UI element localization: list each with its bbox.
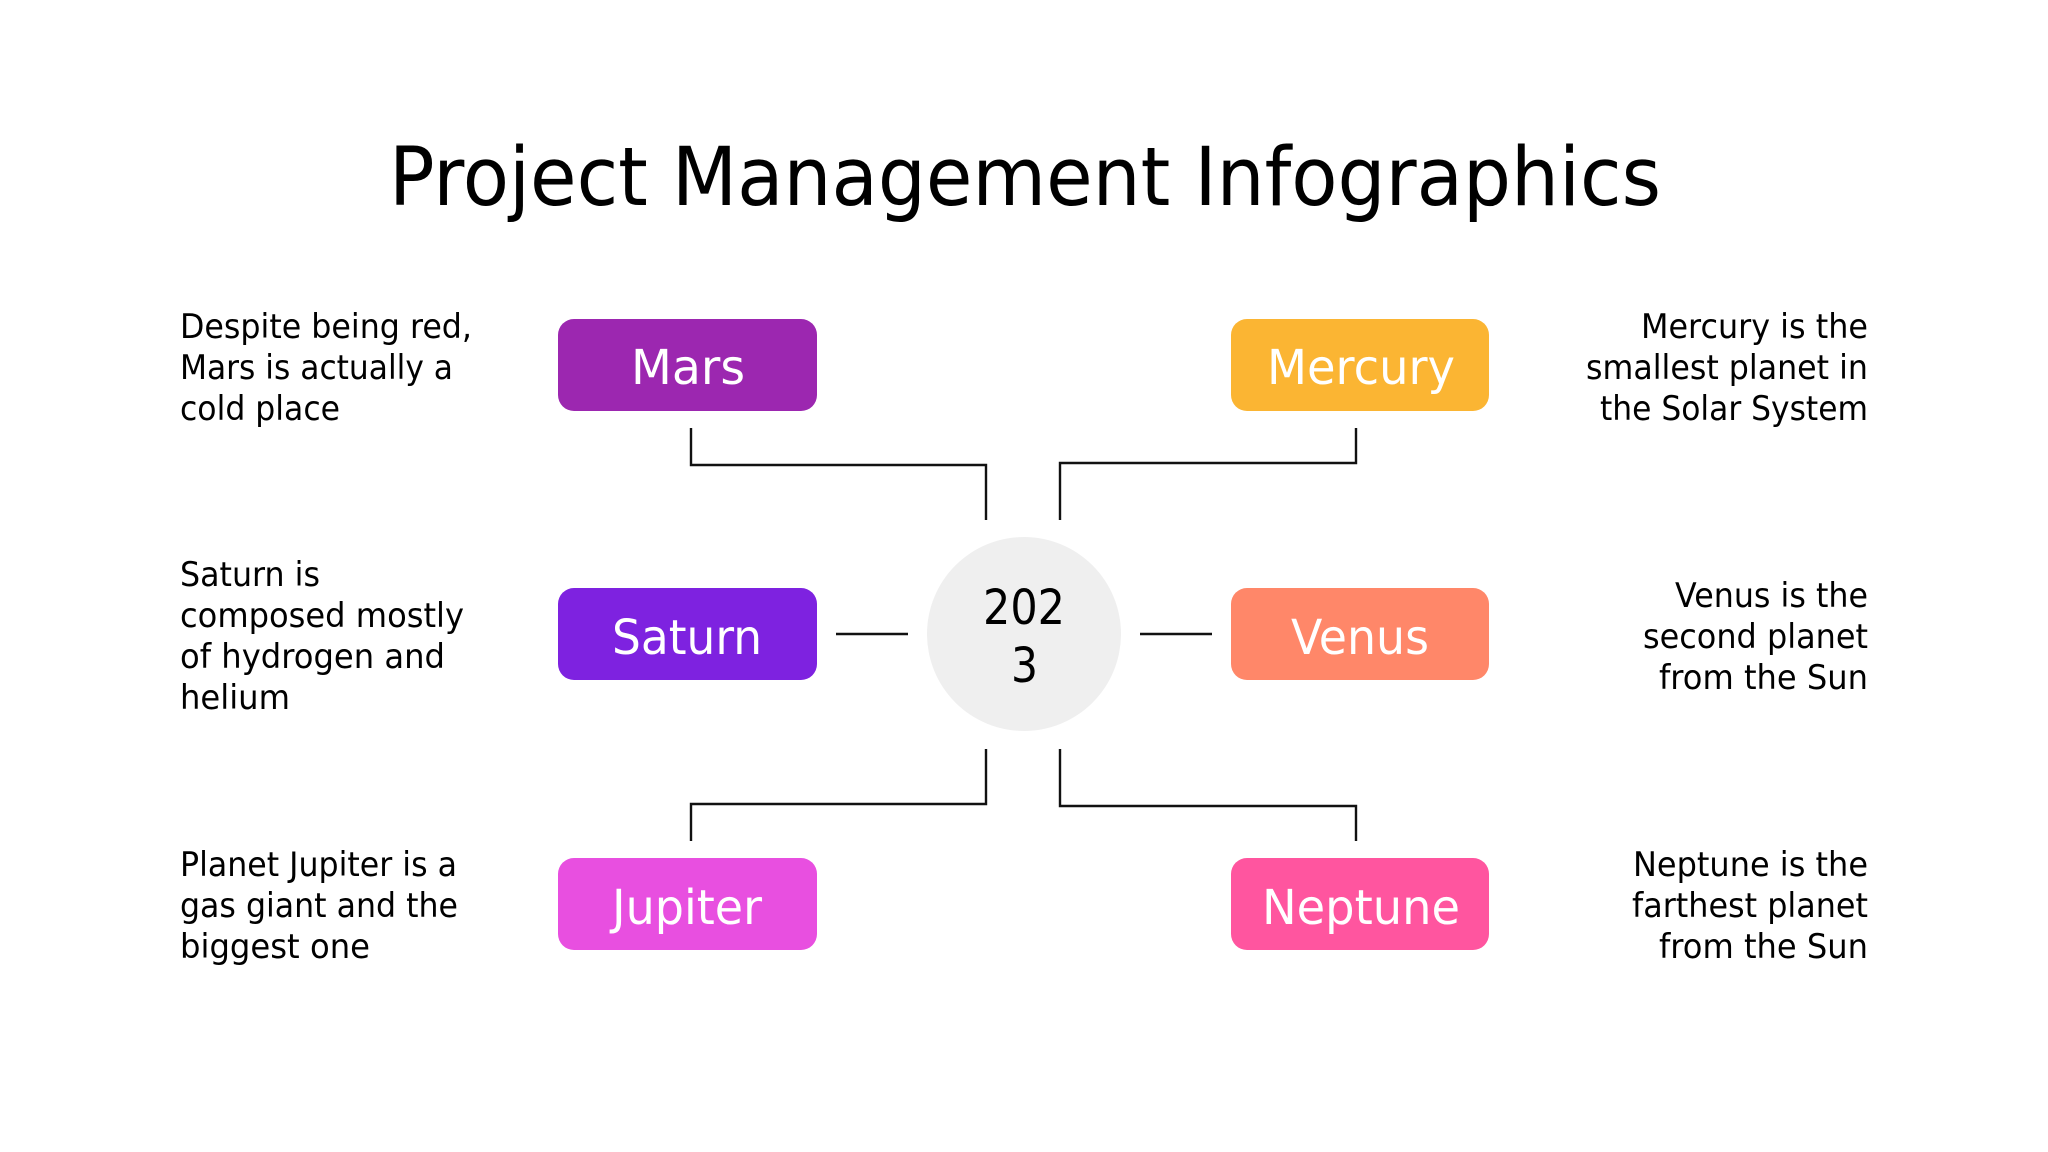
label box: Mercury: Mercury	[1267, 340, 1455, 396]
label box: Saturn: Saturn	[612, 610, 762, 666]
text block: Neptune description: Neptune is the	[1633, 845, 1868, 884]
text block: Venus description: Venus is the	[1675, 576, 1868, 615]
centre circle: year: 202	[983, 580, 1065, 636]
text block: Mercury description	[1586, 307, 1868, 428]
label box: Venus: Venus	[1291, 610, 1429, 666]
label box: Saturn	[558, 588, 817, 680]
text block: Neptune description: farthest planet	[1632, 886, 1868, 925]
connector: Mercury to centre	[1060, 428, 1356, 520]
title: Project Management Infographics	[389, 131, 1661, 225]
text block: Neptune description	[1632, 845, 1868, 966]
label box: Neptune	[1231, 858, 1489, 950]
centre circle: year	[927, 537, 1121, 731]
text block: Venus description: second planet	[1643, 617, 1868, 656]
text block: Venus description	[1643, 576, 1868, 697]
connector: Venus to centre	[1140, 633, 1212, 635]
text block: Saturn description: helium	[180, 678, 290, 717]
text block: Mars description: Despite being red,	[180, 307, 472, 346]
text block: Mars description: cold place	[180, 389, 340, 428]
text block: Mercury description: Mercury is the	[1641, 307, 1868, 346]
text block: Saturn description: composed mostly	[180, 596, 464, 635]
label box: Neptune: Neptune	[1262, 880, 1460, 936]
label box: Venus	[1231, 588, 1489, 680]
centre circle: year: 3	[1011, 638, 1038, 694]
text block: Mars description: Mars is actually a	[180, 348, 453, 387]
text block: Jupiter description: biggest one	[180, 927, 370, 966]
text block: Jupiter description: Planet Jupiter is a	[180, 845, 457, 884]
text block: Mars description	[180, 307, 472, 428]
label box: Jupiter: Jupiter	[609, 880, 762, 936]
connector: Mars to centre	[691, 428, 986, 520]
text block: Saturn description: Saturn is	[180, 555, 320, 594]
text block: Jupiter description	[180, 845, 458, 966]
label box: Mars	[558, 319, 817, 411]
label box: Mercury	[1231, 319, 1489, 411]
text block: Jupiter description: gas giant and the	[180, 886, 458, 925]
text block: Mercury description: the Solar System	[1600, 389, 1868, 428]
text block: Saturn description	[180, 555, 464, 717]
connector: Saturn to centre	[836, 633, 908, 635]
label box: Mars: Mars	[631, 340, 745, 396]
text block: Venus description: from the Sun	[1659, 658, 1868, 697]
connector: Jupiter to centre	[691, 749, 986, 841]
text block: Neptune description: from the Sun	[1659, 927, 1868, 966]
label box: Jupiter	[558, 858, 817, 950]
text block: Mercury description: smallest planet in	[1586, 348, 1868, 387]
text block: Saturn description: of hydrogen and	[180, 637, 445, 676]
connector: Neptune to centre	[1060, 749, 1356, 841]
